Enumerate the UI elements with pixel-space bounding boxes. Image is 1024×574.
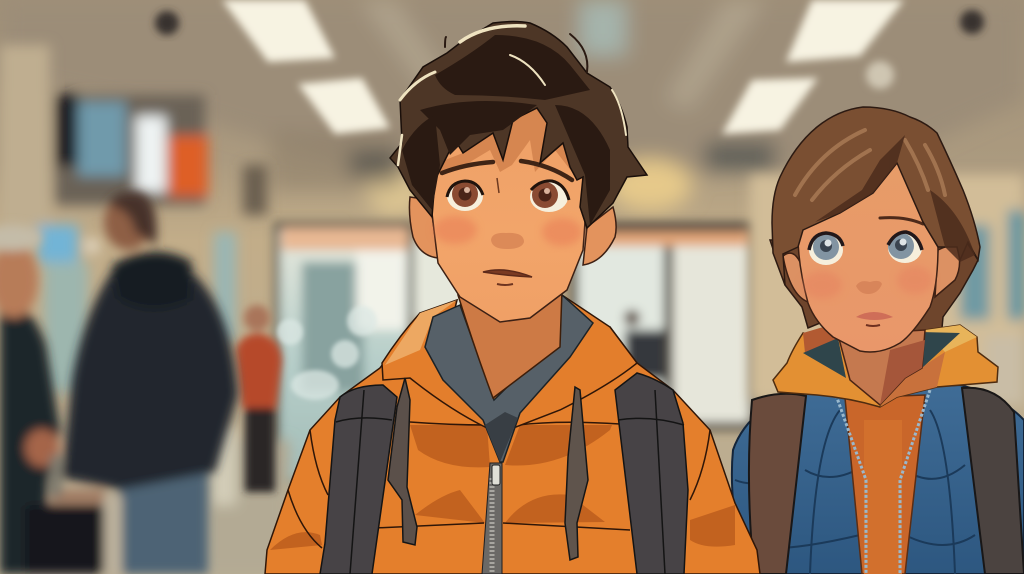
floor: [200, 425, 290, 574]
boy: face: [430, 100, 587, 322]
person: far left: [0, 300, 60, 574]
girl: jacket: [732, 385, 1024, 574]
boy: nose: [491, 233, 524, 249]
person: jeans: [118, 465, 208, 574]
girl: eyes: [809, 232, 922, 265]
girl: neck: [838, 330, 925, 405]
girl: cheeks: [802, 271, 842, 299]
girl: hair: [772, 107, 980, 285]
boy: grey hoodie: [425, 295, 593, 462]
girl: hair shadow: [815, 135, 975, 262]
girl: nose and mouth: [856, 281, 882, 294]
girl: face: [798, 160, 938, 352]
boy: hair highlights: [398, 26, 626, 165]
boy: cheeks: [433, 216, 477, 244]
girl: hood inner: [803, 338, 846, 378]
girl: hood: [773, 325, 998, 407]
boy: eyebrows: [442, 161, 572, 180]
person: black hoodie: [62, 253, 238, 490]
boy: jacket body: [265, 313, 760, 574]
boy: [265, 22, 760, 574]
boy: jacket shadows: [270, 425, 735, 550]
girl: eyebrow: [880, 218, 923, 224]
boy: mouth: [483, 270, 532, 277]
boy: zipper: [482, 463, 502, 574]
window light bubbles: [277, 306, 377, 400]
person: head: [104, 194, 152, 250]
boy: collar highlight: [385, 300, 457, 365]
girl: back hair: [770, 200, 978, 350]
ceiling: [0, 0, 1024, 216]
boy: hood collar: [382, 295, 637, 432]
girl: orange hoodie centre: [845, 395, 925, 574]
girl: [732, 107, 1024, 574]
blurred people on the left: [0, 192, 238, 574]
boy: neck: [458, 290, 562, 398]
boy: dark hair strands: [402, 35, 610, 225]
left wall and signage: [0, 45, 267, 392]
blurred person in red: [236, 305, 282, 492]
boy: left backpack strap: [320, 385, 397, 574]
ceiling cameras: [155, 10, 984, 35]
ceiling lights: [222, 0, 904, 134]
boy: forehead shadow: [432, 108, 583, 177]
girl: ears: [783, 253, 808, 302]
suitcase: [25, 505, 105, 574]
boy: drawstrings: [388, 378, 417, 545]
boy: jacket seams: [288, 422, 710, 548]
boy: hair: [390, 22, 647, 228]
girl: hood shading: [803, 322, 840, 353]
boy: ears: [409, 197, 438, 258]
doors and windows: [274, 222, 755, 482]
girl: backpack straps: [749, 394, 806, 574]
right wall and windows: [750, 175, 1024, 405]
girl: hair highlights: [795, 130, 945, 200]
boy: eyes: [447, 181, 569, 212]
boy: right backpack strap: [615, 373, 688, 574]
